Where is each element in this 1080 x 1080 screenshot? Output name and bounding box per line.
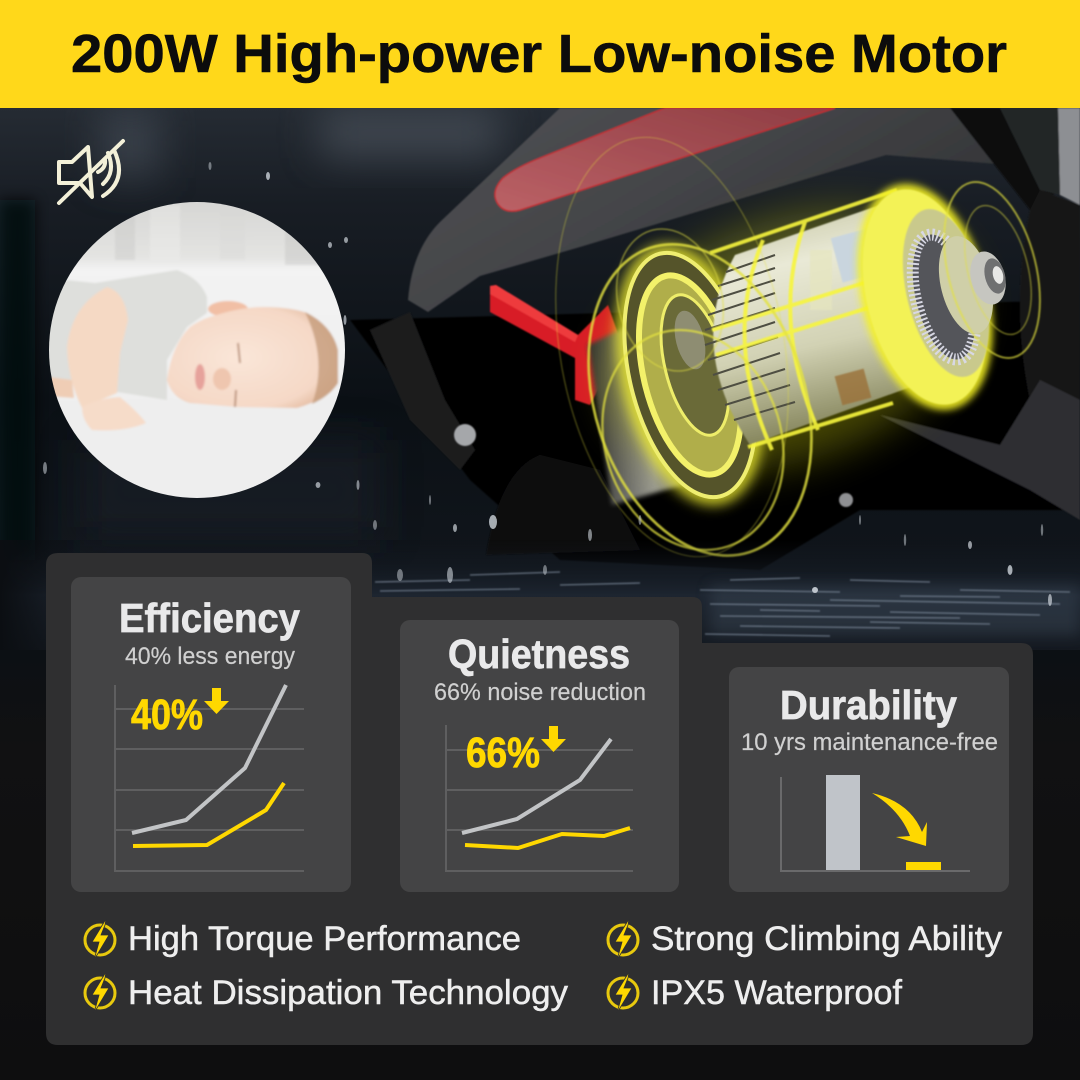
right rotor ring [842,176,1008,418]
title: 200W High-power Low-noise Motor [71,24,1007,84]
baby arm [67,287,128,408]
heading: Efficiency: Efficiency [119,595,300,641]
motor glow [570,162,1010,518]
red pointer mark [490,285,622,405]
heading: Durability: Durability [780,682,957,728]
baby ear [208,301,248,317]
icon: bolt [85,919,115,960]
wet ground with ripples [0,540,1080,650]
heading: Quietness: Quietness [448,631,630,677]
coloured winding detail [810,227,883,405]
feature: IPX5 Waterproof: IPX5 Waterproof [651,974,903,1012]
arrow: curved down [872,793,927,846]
icon: bolt [608,919,638,960]
curtain background [116,218,318,265]
photo: sleeping baby [44,196,352,504]
feature: Strong Climbing Ability: Strong Climbing Ability [651,920,1002,958]
feature: Heat Dissipation Technology: Heat Dissipation Technology [128,974,568,1012]
panel: Efficiency [71,577,351,892]
motor housing [588,315,735,505]
yellow cage lines [710,190,900,450]
feature: High Torque Performance: High Torque Performance [128,920,521,958]
bar chart: maintenance [781,775,970,871]
icon: muted speaker [59,141,123,203]
baby shirt [44,270,207,400]
panel: stepped features panel [46,553,1033,1045]
baby lips and nose [195,364,231,390]
vibration rings [525,119,1056,585]
baby far arm [48,377,74,398]
motor shaft nut [965,248,1011,308]
text: 40% less energy: 40% less energy [125,643,295,670]
icon: bolt [608,972,638,1013]
panel: Quietness [400,620,679,892]
left rotor ring [602,239,778,511]
baby hand [82,397,146,430]
baby eyes [235,343,240,407]
header band [0,0,1080,108]
baby hair [305,312,338,404]
line chart: noise [446,725,633,871]
motor cylinder [713,205,930,445]
line chart: energy [115,685,304,871]
text: 66% noise reduction: 66% noise reduction [434,679,646,706]
stat: 40% down: 40% [131,691,203,739]
motor illustration [525,119,1056,585]
icon: bolt [85,972,115,1013]
scooter body [350,108,1080,570]
mattress [44,395,350,504]
stat: 66% down: 66% [466,729,540,777]
stator fins [705,255,795,420]
text: 10 yrs maintenance-free: 10 yrs maintenance-free [741,729,998,756]
rain drops [43,162,1052,606]
panel: Durability [729,667,1009,892]
baby head [167,307,338,408]
